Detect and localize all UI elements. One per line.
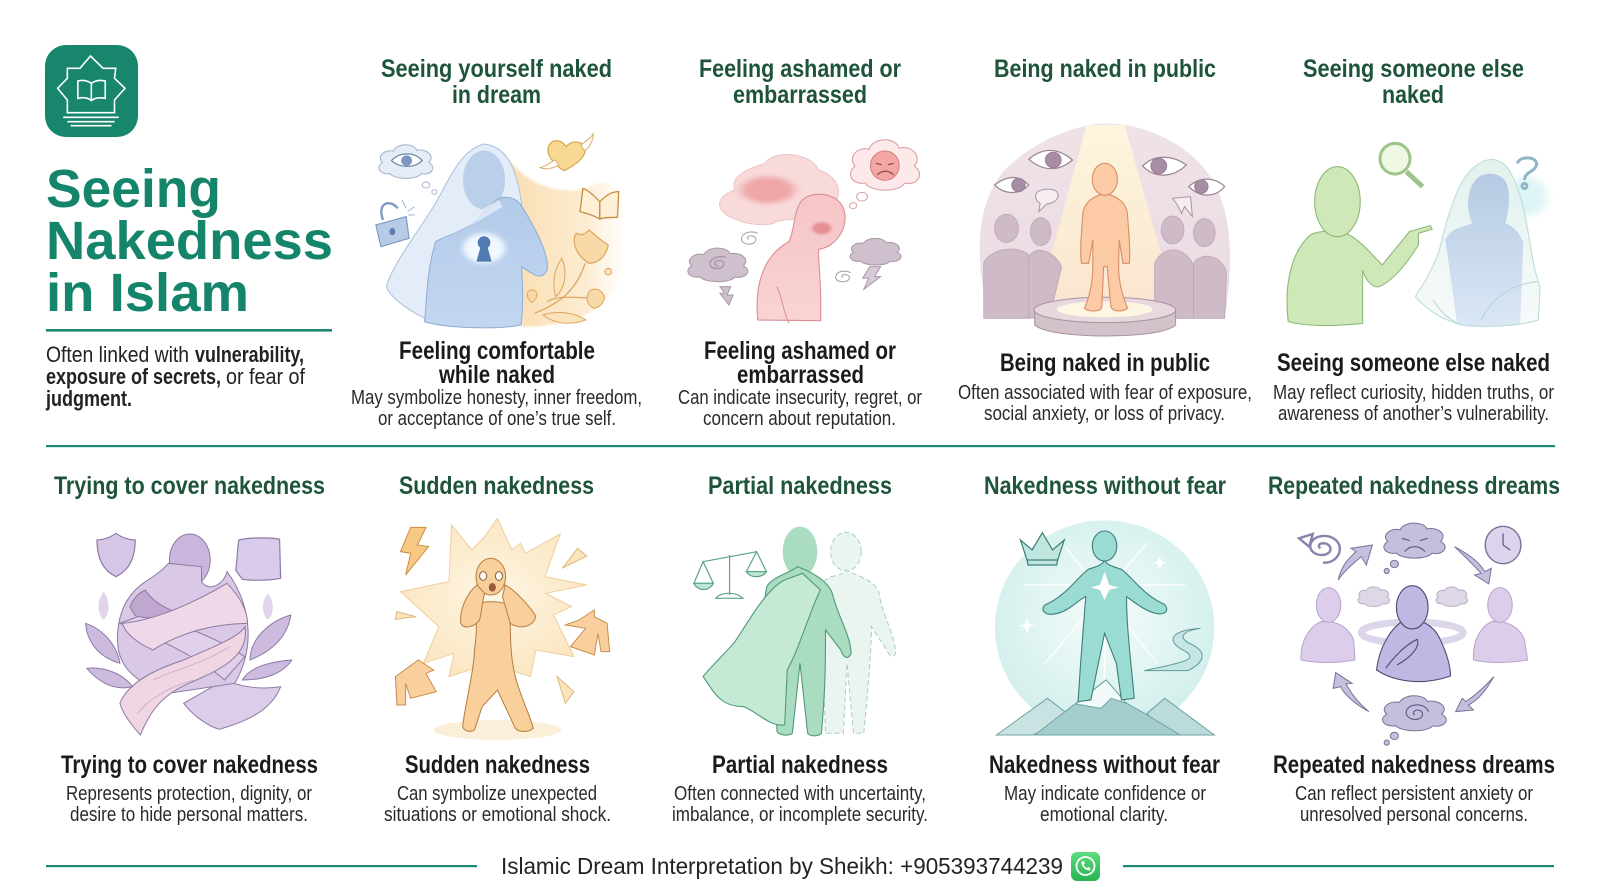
icon: storm clouds and lightning <box>688 232 901 305</box>
icon: open book <box>580 188 619 219</box>
contact text: Islamic Dream Interpretation by Sheikh: +905393744239 <box>501 853 1063 879</box>
description: or acceptance of one’s true self. <box>378 408 616 430</box>
illustration: figure wrapped in scarf <box>86 533 292 735</box>
crowd silhouettes <box>984 214 1227 318</box>
illustration: ashamed figure under clouds <box>688 140 920 323</box>
title: embarrassed <box>737 361 864 389</box>
footer line left <box>46 865 477 867</box>
small clouds <box>1358 587 1390 606</box>
heading <box>699 55 901 109</box>
icon: spiral <box>1299 534 1340 563</box>
icon: speech bubble <box>1036 189 1058 212</box>
description <box>1295 783 1533 826</box>
icon: magnifying glass <box>1380 143 1423 187</box>
intro text: exposure of secrets, <box>46 364 221 389</box>
pedestal <box>1034 297 1176 336</box>
figure <box>1043 531 1167 702</box>
icon: pointing green person <box>1287 167 1432 326</box>
description <box>66 783 312 826</box>
description: emotional clarity. <box>1040 804 1168 826</box>
title: Feeling comfortable <box>399 337 595 365</box>
heading: Seeing yourself naked <box>381 55 612 83</box>
icon: eye in cloud <box>379 145 437 194</box>
title <box>46 159 333 323</box>
icon: cycle arrows <box>1333 545 1494 712</box>
illustration: veiled figure with keyhole <box>376 133 623 328</box>
card: seeing yourself naked <box>351 55 642 430</box>
illustration: green observer and veiled figure <box>1287 143 1547 327</box>
description <box>351 387 642 430</box>
row divider <box>46 445 1555 447</box>
illustration: half-clothed figure and dashed outline <box>694 527 896 736</box>
heading: in dream <box>452 81 541 109</box>
title <box>704 337 896 389</box>
description: May indicate confidence or <box>1004 783 1206 805</box>
title: Nakedness without fear <box>989 751 1220 779</box>
icon: folded cloth <box>236 538 281 580</box>
icon: whatsapp <box>1071 852 1100 881</box>
icon: sad thought cloud <box>849 140 920 209</box>
illustration: figure on pedestal watched by eyes <box>980 123 1230 336</box>
description: social anxiety, or loss of privacy. <box>984 403 1225 425</box>
center figure <box>1377 586 1451 682</box>
card: being naked in public <box>958 55 1252 425</box>
description <box>678 387 922 430</box>
description: Can symbolize unexpected <box>397 783 597 805</box>
description: Often associated with fear of exposure, <box>958 382 1252 404</box>
description: imbalance, or incomplete security. <box>672 804 928 826</box>
title: Being naked in public <box>1000 349 1210 377</box>
title: while naked <box>438 361 555 389</box>
icon: question mark <box>1517 158 1537 189</box>
icon: shield <box>97 533 135 577</box>
description: May reflect curiosity, hidden truths, or <box>1273 382 1554 404</box>
title: Feeling ashamed or <box>704 337 896 365</box>
icon: rotating ring <box>1361 622 1463 643</box>
heading: Nakedness without fear <box>984 472 1226 500</box>
description <box>672 783 928 826</box>
description <box>1273 382 1554 425</box>
heading: naked <box>1382 81 1444 109</box>
card: partial nakedness <box>672 472 928 826</box>
icon: open padlock <box>376 200 415 247</box>
illustration: confident figure on mountain <box>995 520 1214 735</box>
icon: watching eyes <box>995 151 1225 195</box>
description <box>384 783 611 826</box>
intro text: judgment. <box>45 386 132 411</box>
description: May symbolize honesty, inner freedom, <box>351 387 642 409</box>
heading: Sudden nakedness <box>399 472 594 500</box>
intro text: Often linked with <box>46 342 189 367</box>
icon: keyhole <box>476 236 492 262</box>
card: sudden nakedness <box>384 472 611 826</box>
icon: whispering hand <box>1173 197 1192 217</box>
description: unresolved personal concerns. <box>1300 804 1528 826</box>
illustration: startled figure in burst <box>395 518 610 740</box>
description <box>1004 783 1206 826</box>
description: situations or emotional shock. <box>384 804 611 826</box>
icon: shards <box>395 548 587 703</box>
description: concern about reputation. <box>703 408 896 430</box>
icon: winged heart <box>540 133 593 171</box>
heading: Partial nakedness <box>708 472 892 500</box>
icon: crown <box>1020 533 1064 565</box>
icon: leaves <box>86 615 292 688</box>
mountains <box>996 680 1214 735</box>
heading <box>1303 55 1524 109</box>
description: Can reflect persistent anxiety or <box>1295 783 1533 805</box>
intro text: vulnerability, <box>195 342 304 367</box>
title: Nakedness <box>46 211 333 271</box>
description: Can indicate insecurity, regret, or <box>678 387 922 409</box>
title: Partial nakedness <box>712 751 888 779</box>
title underline <box>46 329 332 332</box>
heading: Trying to cover nakedness <box>54 472 325 500</box>
footer <box>46 852 1554 881</box>
title <box>399 337 595 389</box>
description: Often connected with uncertainty, <box>674 783 926 805</box>
icon: flowers and stem <box>527 230 612 323</box>
card: feeling ashamed <box>678 55 922 430</box>
heading: Feeling ashamed or <box>699 55 901 83</box>
description: desire to hide personal matters. <box>70 804 308 826</box>
heading: embarrassed <box>733 81 867 109</box>
heading <box>381 55 612 109</box>
header panel: logo, title, intro <box>45 45 333 411</box>
icon: flying shirts <box>395 610 610 705</box>
side figures <box>1301 588 1528 662</box>
description <box>958 382 1252 425</box>
card: seeing someone else naked <box>1273 55 1554 425</box>
card: trying to cover nakedness <box>54 472 325 826</box>
heading: Being naked in public <box>994 55 1216 83</box>
heading: Seeing someone else <box>1303 55 1524 83</box>
icon: lightning bolt <box>401 527 429 575</box>
intro text: or fear of <box>226 364 306 389</box>
logo icon: book in star <box>45 45 138 137</box>
card: repeated nakedness dreams <box>1268 472 1560 826</box>
central figure <box>1081 163 1130 311</box>
description: awareness of another’s vulnerability. <box>1278 403 1549 425</box>
illustration: dream cycle <box>1299 523 1528 745</box>
intro text <box>45 342 306 411</box>
description: Represents protection, dignity, or <box>66 783 312 805</box>
title: in Islam <box>46 263 249 323</box>
icon: winding road <box>1144 628 1202 671</box>
title: Seeing <box>46 159 221 219</box>
title: Trying to cover nakedness <box>61 751 318 779</box>
icon: clock <box>1485 526 1521 564</box>
icon: thought clouds <box>1383 523 1446 745</box>
icon: balance scales <box>694 552 766 598</box>
title: Sudden nakedness <box>405 751 590 779</box>
footer line right <box>1123 865 1554 867</box>
card: nakedness without fear <box>984 472 1226 826</box>
